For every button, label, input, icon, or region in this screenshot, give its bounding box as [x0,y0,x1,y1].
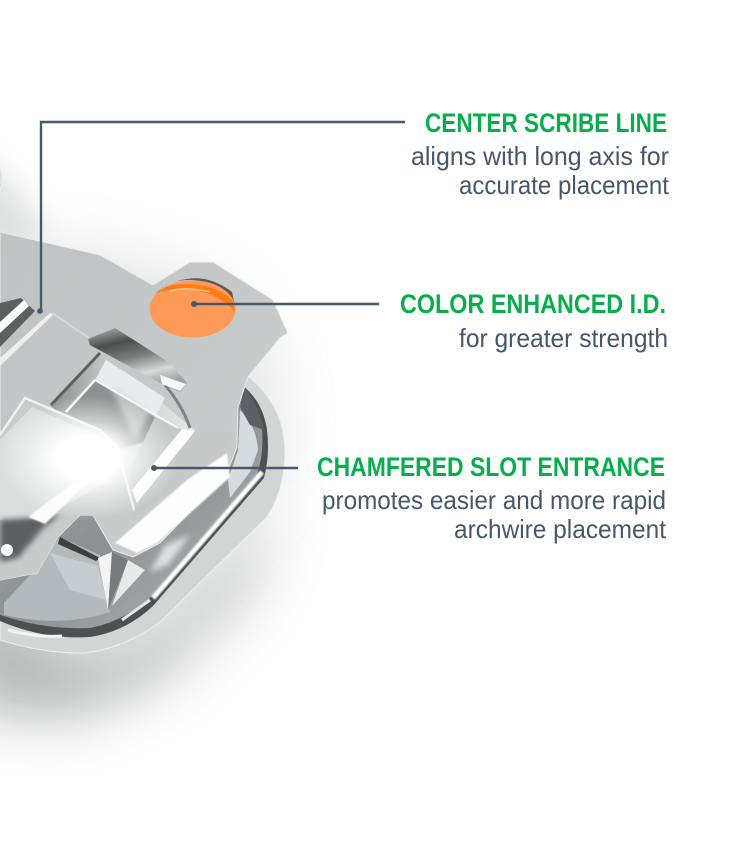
small bracket edge at top left [0,166,2,190]
callout: center scribe line: accurate placement [459,170,670,200]
upper seam highlight [52,313,92,340]
callout: chamfered slot entrance [317,452,667,544]
slot interior [50,353,195,503]
tie wing hook [88,328,187,392]
leader line: chamfered slot entrance [151,465,298,471]
callout: center scribe line: aligns with long axis for [411,141,669,171]
callout: center scribe line [411,108,670,200]
base pad [0,376,285,653]
leader line: center scribe line [37,122,405,314]
center scribe groove [0,298,53,366]
soft drop shadow [0,150,285,720]
callout: center scribe line: CENTER SCRIBE LINE [425,108,667,138]
front slot wall [0,398,135,580]
lower right chamfer [115,432,237,553]
bracket illustration [0,150,288,720]
central glare [0,396,178,520]
dark lower-left reflection [0,515,60,562]
top wing body [0,232,288,580]
colour ID dot [150,278,236,338]
callout: chamfered slot entrance: archwire placement [454,514,667,544]
leader line: color enhanced I.D. [191,301,379,307]
callout: color enhanced I.D. [400,289,668,353]
callout: chamfered slot entrance: promotes easier and more rapid [322,485,666,515]
base well [0,386,268,637]
callout: chamfered slot entrance: CHAMFERED SLOT ENTRANCE [317,452,665,482]
callout: color enhanced I.D.: for greater strength [459,323,668,353]
well floor stripes [4,537,110,621]
callout: color enhanced I.D.: COLOR ENHANCED I.D. [400,289,666,319]
